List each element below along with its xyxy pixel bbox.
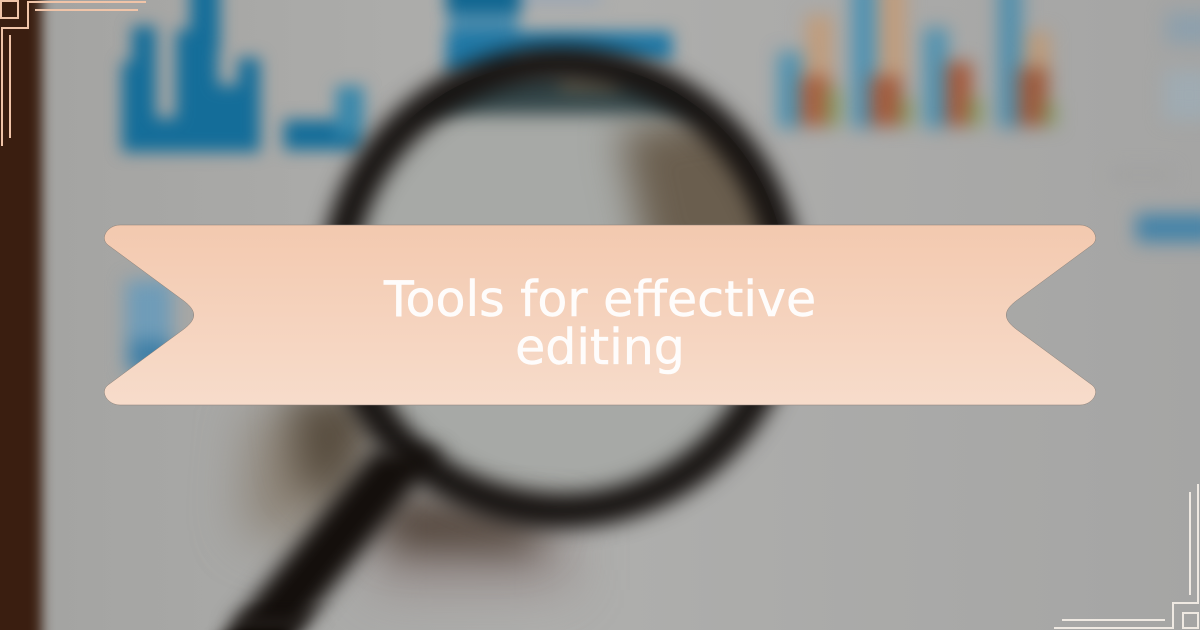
shadow under the magnifier (245, 410, 570, 590)
magnifier handle (228, 450, 443, 630)
far right panels (1112, 12, 1200, 242)
multicolour bar chart, top right (778, 0, 1056, 128)
magnifier ring (337, 63, 785, 511)
title: Tools for effective (384, 271, 816, 328)
corner ornament: top left (1, 1, 146, 146)
left dark edge (0, 0, 42, 630)
left lower blue panel (126, 280, 172, 372)
ribbon banner (104, 225, 1096, 405)
title: editing (515, 319, 685, 376)
corner ornament: bottom right (1054, 484, 1198, 628)
blue bar chart, left (122, 0, 364, 152)
title (384, 271, 816, 376)
magnifier lens interior (428, 70, 772, 225)
blue block chart, top centre (446, 0, 672, 74)
